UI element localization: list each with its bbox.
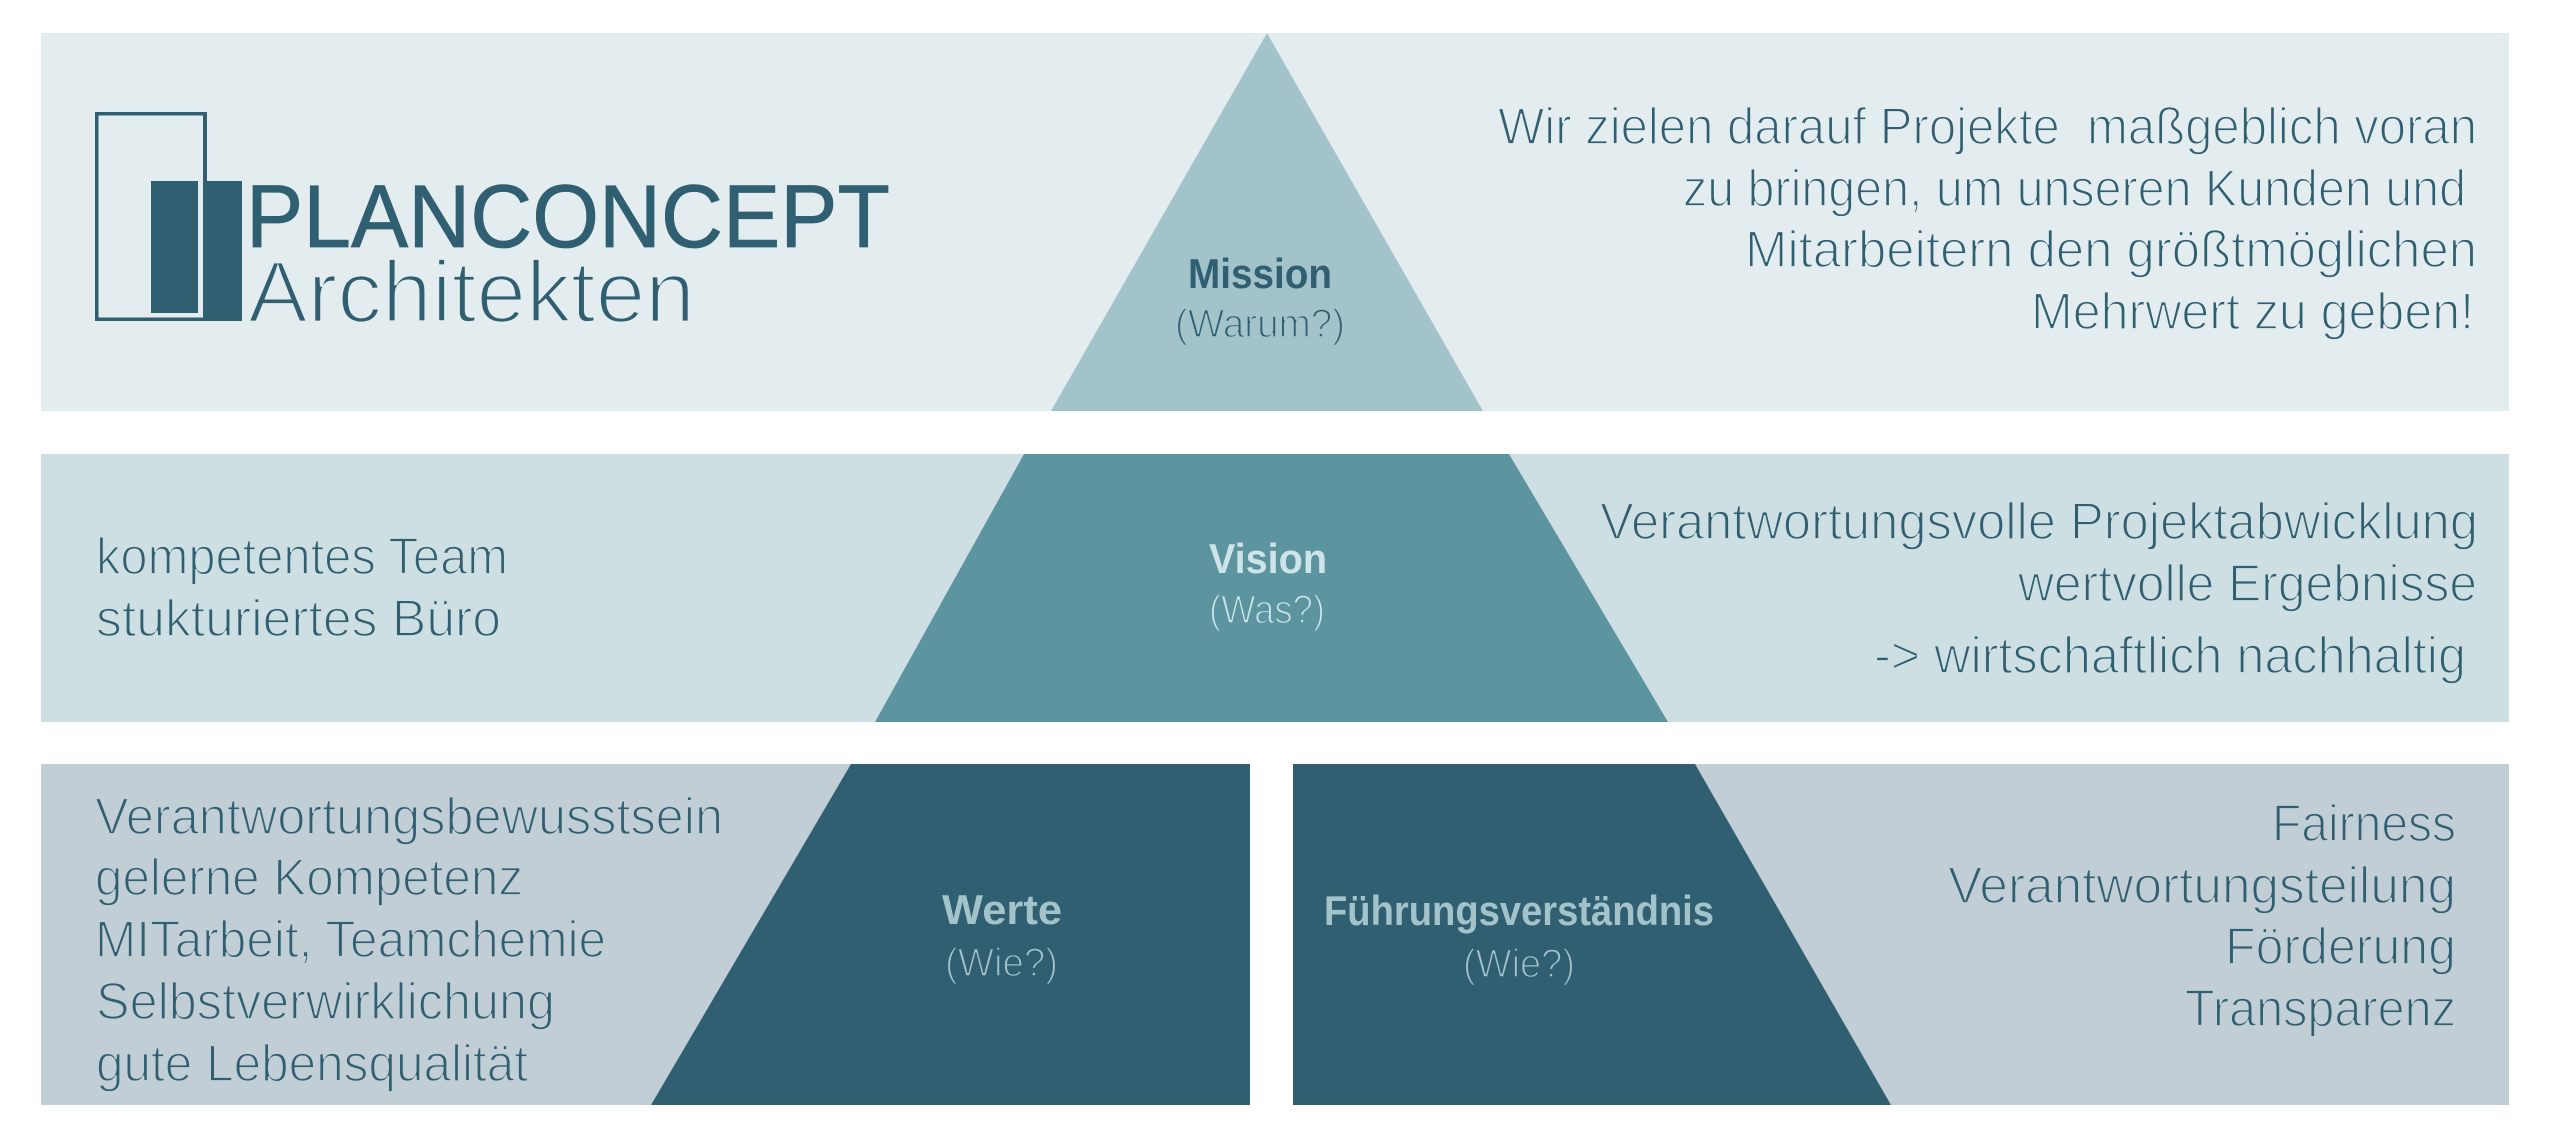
panel: werte [41,764,1250,1105]
text block: results: -> wirtschaftlich nachhaltig [1874,627,2466,685]
label: Wie: (Wie?) [1463,942,1575,986]
logo: PLANCONCEPT Architekten [95,112,890,341]
label: Wie: (Wie?) [945,941,1058,985]
trapezoid: werte [651,764,1250,1105]
heading: Mission: Mission [1188,250,1332,297]
text block: values list [95,788,723,1093]
text block: values list: Selbstverwirklichung [96,973,555,1031]
heading: Werte: Werte [942,886,1062,933]
text block: mission statement: zu bringen, um unseren Kunden und [1683,160,2466,218]
text block: leadership list [1948,795,2456,1038]
logo subtitle: Architekten [248,244,695,341]
text block: results [1600,493,2478,685]
text block: values list: MITarbeit, Teamchemie [95,911,606,969]
panel: vision [41,454,2509,722]
text block: values list: gute Lebensqualität [96,1035,529,1093]
trapezoid: fuehrungsverstaendnis [1293,764,1891,1105]
text block: mission statement [1498,98,2477,341]
heading: Führungsverständnis: Führungsverständnis [1324,887,1714,934]
label: Warum: (Warum?) [1175,302,1345,346]
label: Was: (Was?) [1209,588,1325,632]
text block: results: wertvolle Ergebnisse [2017,555,2477,613]
text block: leadership list: Verantwortungsteilung [1948,857,2456,915]
text block: team [96,528,508,648]
text block: values list: gelerne Kompetenz [95,849,523,907]
text block: leadership list: Fairness [2272,795,2456,853]
panel: mission [41,33,2509,411]
text block: leadership list: Transparenz [2185,980,2456,1038]
text block: leadership list: Förderung [2225,918,2456,976]
text block: mission statement: Wir zielen darauf Projekte maßgeblich voran [1498,98,2477,156]
icon: building outline and blocks [95,112,242,321]
logo wordmark: PLANCONCEPT [246,166,890,266]
text block: mission statement: Mehrwert zu geben! [2031,283,2474,341]
text block: values list: Verantwortungsbewusstsein [95,788,723,846]
text block: team: stukturiertes Büro [96,590,501,648]
panel: fuehrungsverstaendnis [1293,764,2509,1105]
heading: Vision: Vision [1209,535,1327,582]
text block: results: Verantwortungsvolle Projektabwicklung [1600,493,2478,551]
trapezoid: vision [875,454,1668,722]
triangle: mission [1051,33,1483,411]
text block: mission statement: Mitarbeitern den größtmöglichen [1745,221,2477,279]
text block: team: kompetentes Team [96,528,508,586]
